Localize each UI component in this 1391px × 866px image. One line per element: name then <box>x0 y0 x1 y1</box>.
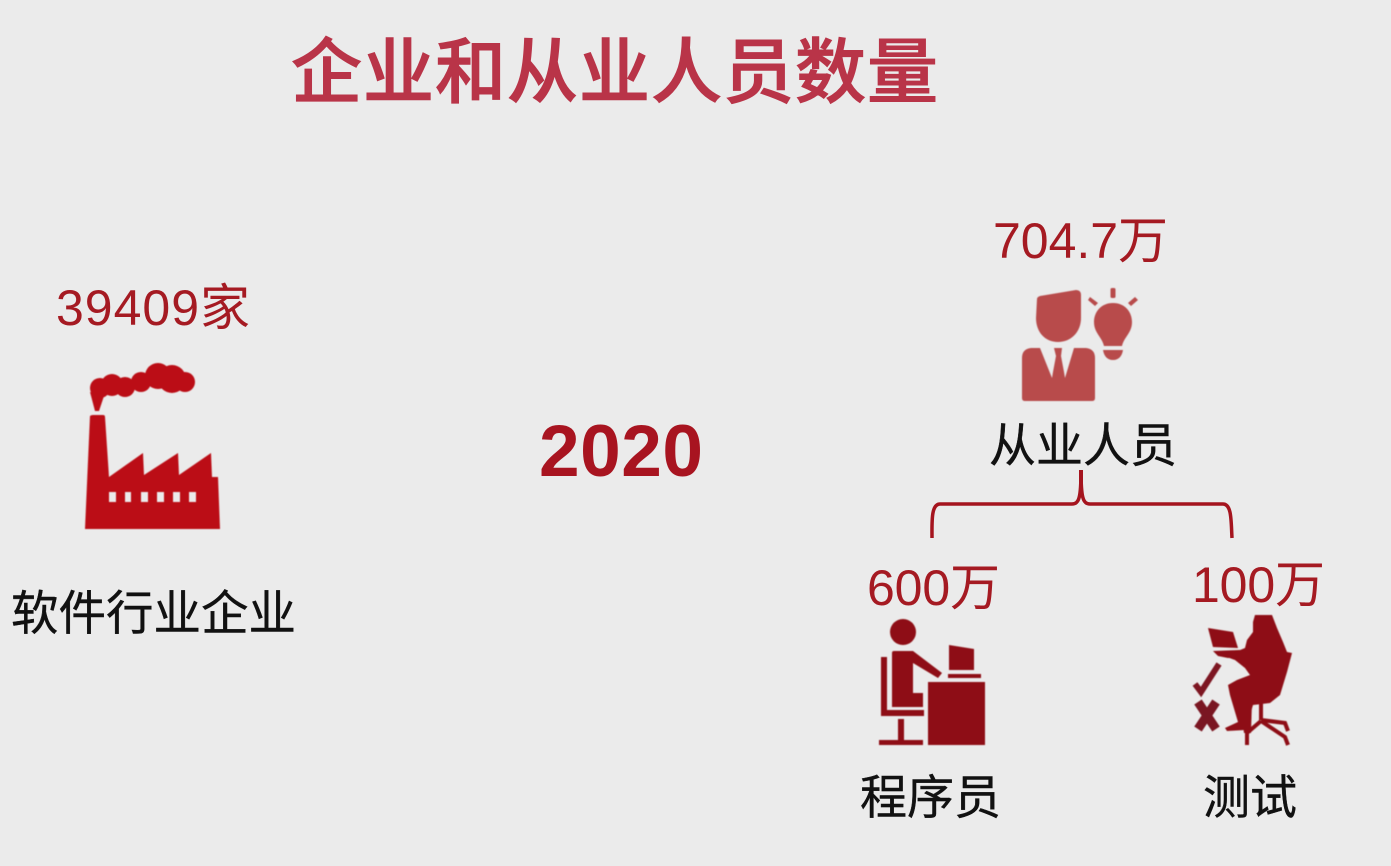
icon: person with light bulb <box>1022 288 1138 401</box>
programmer count: 600万 <box>867 560 1000 616</box>
company count: 39409家 <box>56 280 250 336</box>
tester count: 100万 <box>1192 557 1325 613</box>
icon: tester with laptop <box>1195 615 1292 745</box>
tester label: 测试 <box>1203 759 1297 828</box>
employee count: 704.7万 <box>993 213 1168 269</box>
icon: check mark <box>1195 664 1219 692</box>
panel: testers <box>1192 557 1325 828</box>
panel: programmers <box>860 560 1001 828</box>
company label: 软件行业企业 <box>11 575 296 644</box>
panel: software companies <box>11 280 296 644</box>
icon: cross mark <box>1198 702 1216 729</box>
year: 2020 <box>539 411 703 492</box>
chair base <box>1247 703 1288 745</box>
panel: employees <box>932 213 1232 538</box>
icon: factory <box>85 363 220 529</box>
employee label: 从业人员 <box>989 407 1177 476</box>
title: 企业和从业人员数量 <box>291 16 938 118</box>
bracket <box>932 470 1232 538</box>
icon: programmer at desk <box>879 619 985 745</box>
programmer label: 程序员 <box>860 759 1001 828</box>
